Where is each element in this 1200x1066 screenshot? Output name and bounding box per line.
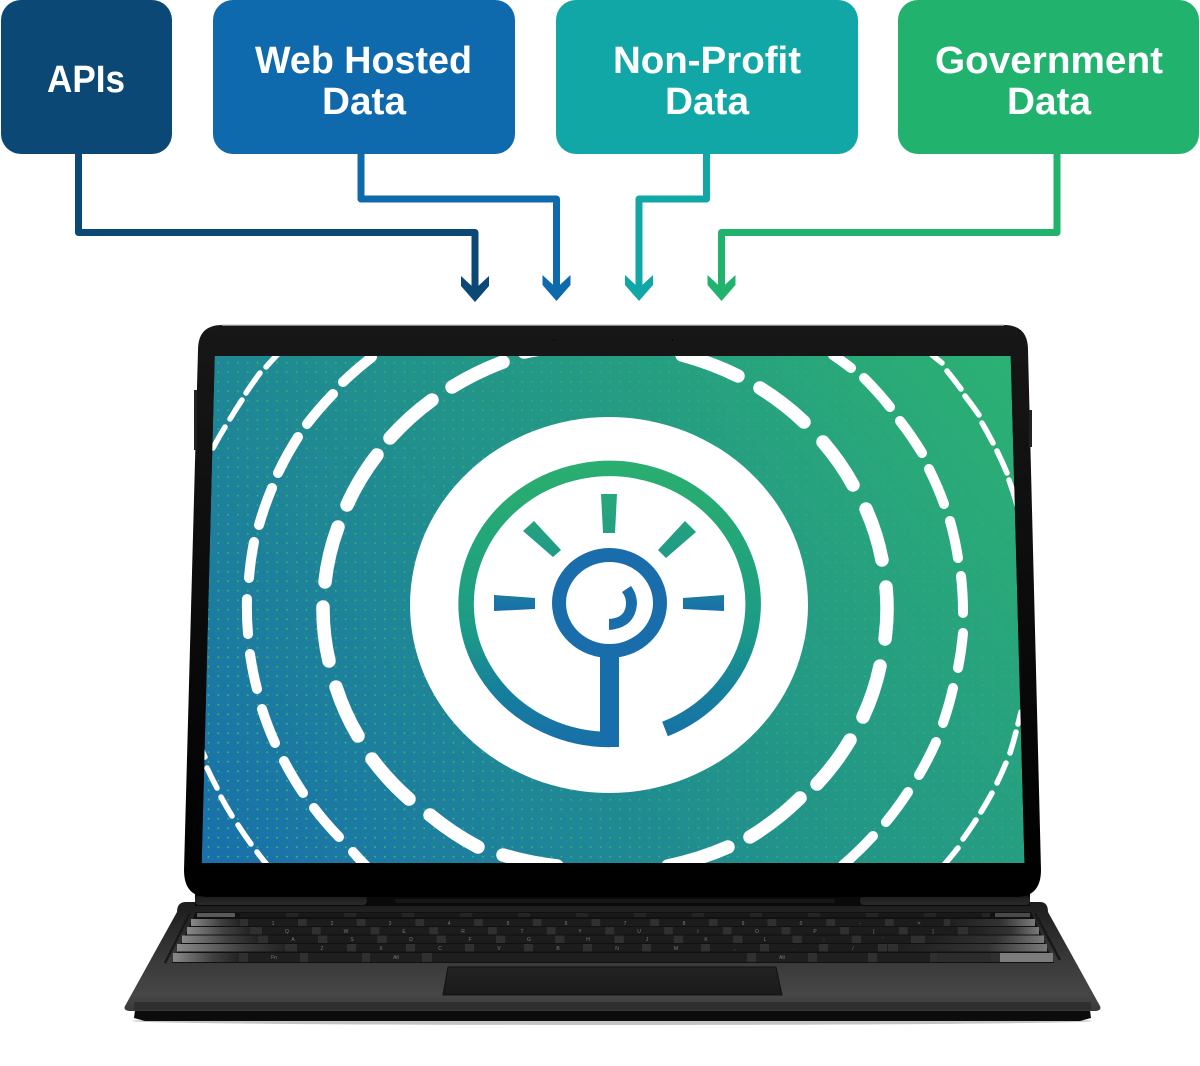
key legends: 8 [683,921,686,927]
keys [173,913,1053,962]
key legends: A [291,937,295,943]
arrow: Government Data to laptop [708,154,1057,301]
box: Web Hosted Data [213,0,515,154]
key legends: X [379,946,383,952]
key legends: U [637,929,641,935]
bezel highlight [222,324,1004,326]
box: Government Data: Data [1007,81,1092,123]
box: Non-Profit Data: Data [665,81,750,123]
key legends: D [409,937,413,943]
arrow: APIs to laptop [78,154,489,302]
key legends: M [674,946,678,952]
box: Government Data [898,0,1199,154]
key legends: 4 [448,921,451,927]
keyboard well [172,912,1054,963]
logo rays [494,494,724,611]
key legends: 5 [507,921,510,927]
key legends: R [461,929,465,935]
key legends: T [520,929,524,935]
key legends: 2 [331,921,334,927]
screen background [202,356,1024,863]
key legends: I [697,929,699,935]
key legends: ' [883,937,884,943]
key legends: Z [320,946,324,952]
key legends: O [755,929,759,935]
key legends: J [646,937,649,943]
key legends: 3 [389,921,392,927]
key legends: 6 [565,921,568,927]
camera dots [553,339,673,341]
dashed ring: middle [247,355,963,867]
key legends: F [468,937,472,943]
key legends: ; [823,937,825,943]
key legends: [ [873,929,875,935]
key legends: 0 [800,921,803,927]
key legends: L [764,937,767,943]
key legends: 7 [624,921,627,927]
box: APIs: APIs [47,59,125,101]
key legends: E [402,929,406,935]
trackpad [443,967,782,995]
key legends: Alt [393,955,400,961]
key legends: V [497,946,501,952]
key legends: K [704,937,708,943]
key legends: C [438,946,442,952]
logo outer arc [466,469,753,740]
key legends: S [350,937,354,943]
key legends: / [852,946,854,952]
key legends: N [615,946,619,952]
key legends: P [813,929,817,935]
key legends: G [527,937,531,943]
key legends: Fn [271,955,277,961]
key legends: Y [578,929,582,935]
screen [200,346,1024,867]
keyboard base [124,902,1100,1025]
laptop screen body [184,325,1041,897]
key legends: H [586,937,590,943]
laptop [124,325,1100,1025]
key legends: - [859,921,861,927]
key legends: 9 [742,921,745,927]
box: Web Hosted Data: Web Hosted [255,40,472,82]
box: Government Data: Government [935,40,1163,82]
logo lens and handle [559,555,660,747]
key legends: . [793,946,795,952]
key legends: B [556,946,560,952]
arrow: Non-Profit Data to laptop [625,154,706,301]
box: Non-Profit Data: Non-Profit [613,40,801,82]
dashed ring: outer [200,354,1021,866]
key legends: 1 [272,921,275,927]
side buttons [196,390,1030,450]
hinge [195,893,1030,906]
arrow: Web Hosted Data to laptop [361,154,570,301]
panel: source boxes [1,0,1199,154]
key legends: Alt [779,955,786,961]
key legends: W [344,929,349,935]
icon: magnifier light bulb logo [466,469,753,747]
dot texture [202,356,1024,863]
key legends: Q [285,929,289,935]
key legends: = [918,921,921,927]
box: Non-Profit Data [556,0,858,154]
box: APIs [1,0,172,154]
key legends: ] [932,929,934,935]
key legends [271,921,934,961]
white centre disc [410,417,808,793]
dashed ring: inner [323,346,887,866]
box: Web Hosted Data: Data [322,81,407,123]
key legends: , [734,946,736,952]
